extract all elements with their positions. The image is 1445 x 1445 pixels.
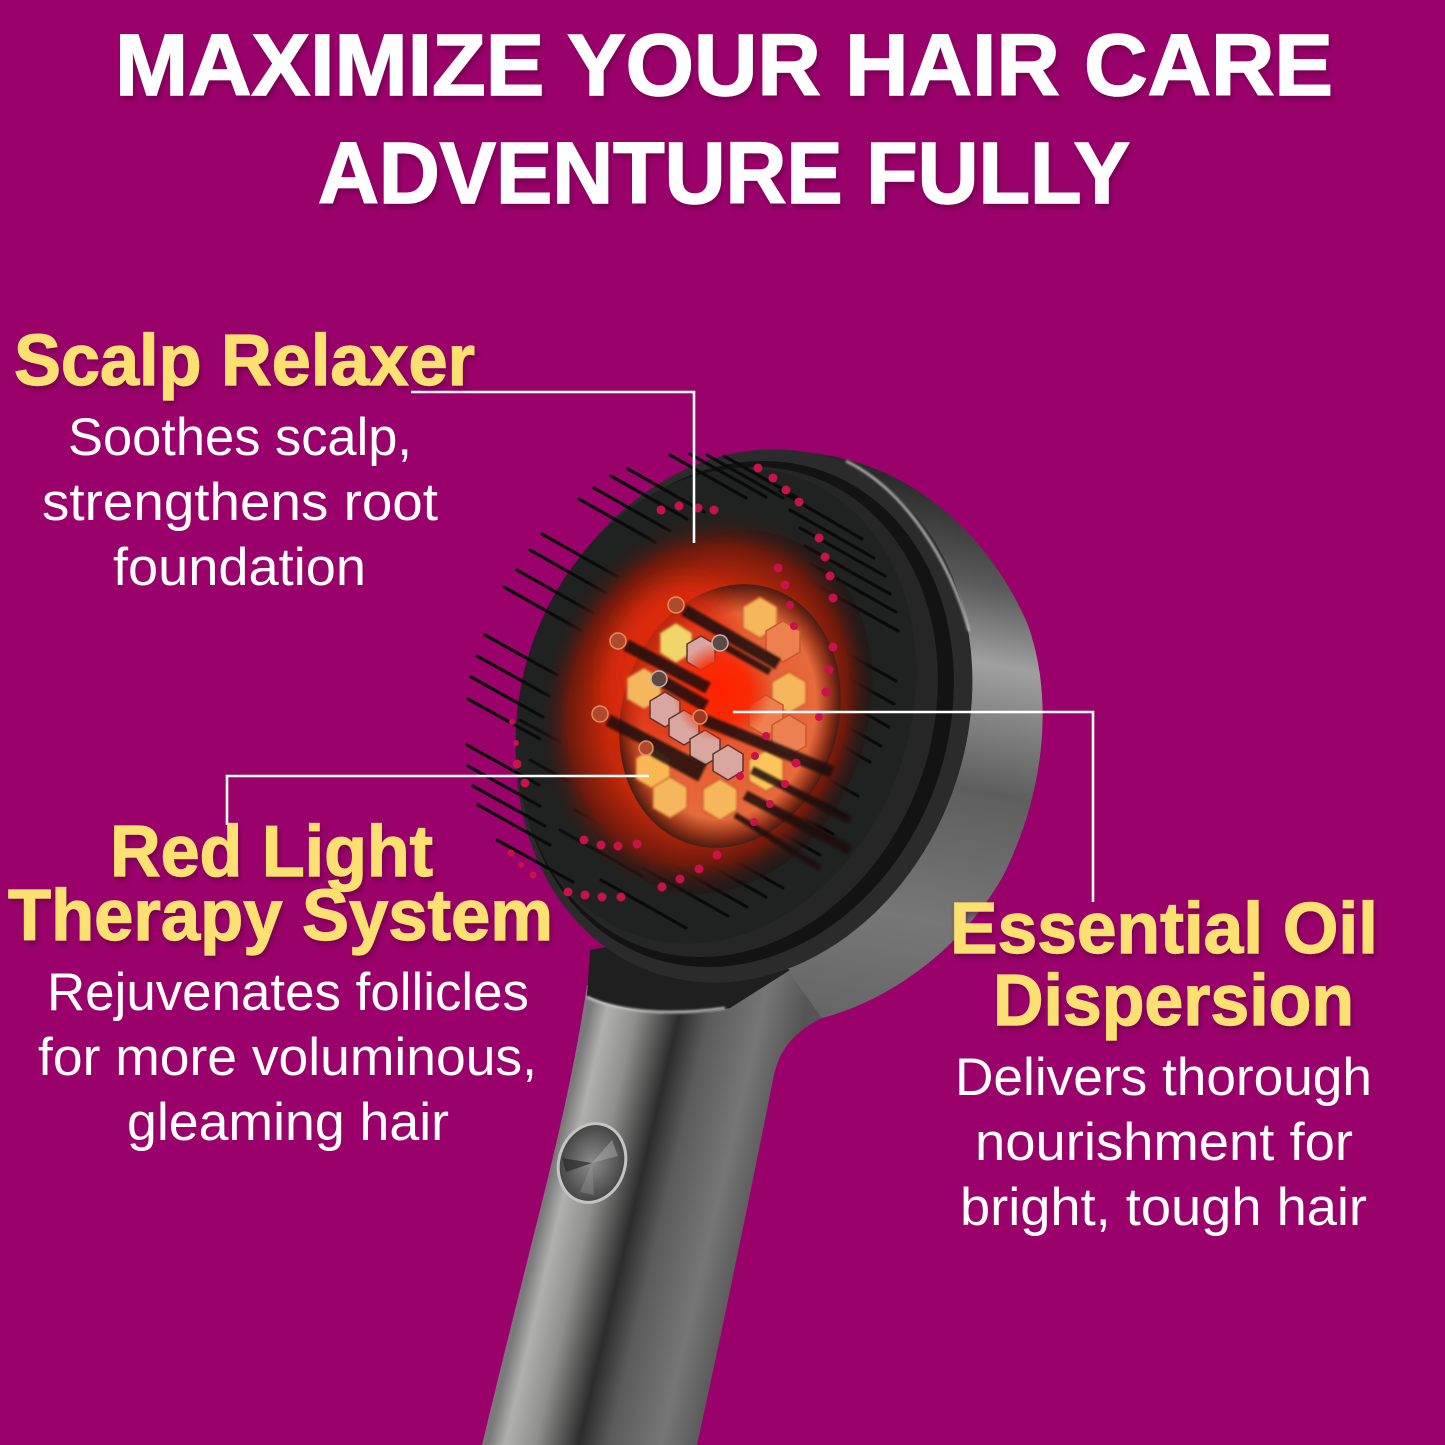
outer bristles bbox=[467, 454, 898, 928]
bristle knobs bbox=[592, 597, 728, 755]
callout: scalp relaxer: Scalp Relaxer bbox=[14, 321, 475, 401]
inner bristle rows bbox=[608, 610, 850, 868]
callout: scalp relaxer: Soothes scalp, bbox=[68, 408, 412, 467]
red glow bbox=[487, 465, 929, 945]
callout: scalp relaxer bbox=[14, 321, 475, 597]
head outer ring bbox=[442, 384, 1046, 1048]
callout: red light therapy system: for more voluminous, bbox=[38, 1028, 537, 1087]
callout: essential oil dispersion: bright, tough hair bbox=[960, 1178, 1367, 1237]
title: ADVENTURE FULLY bbox=[318, 125, 1130, 222]
callout: essential oil dispersion: Essential Oil bbox=[950, 889, 1378, 969]
callout: red light therapy system: Rejuvenates follicles bbox=[47, 963, 529, 1022]
red bristle tips bbox=[508, 464, 838, 902]
title: MAXIMIZE YOUR HAIR CARE bbox=[115, 17, 1333, 114]
illuminated disk bbox=[586, 555, 874, 877]
red overlay on disk bbox=[587, 565, 757, 765]
head rear shell bbox=[620, 452, 1043, 1030]
callout: red light therapy system: gleaming hair bbox=[127, 1093, 449, 1152]
callout line: essential oil dispersion bbox=[733, 712, 1093, 902]
callout: essential oil dispersion: Dispersion bbox=[993, 961, 1354, 1041]
callout: essential oil dispersion: nourishment for bbox=[975, 1113, 1353, 1172]
callout: red light therapy system: Therapy System bbox=[8, 876, 553, 956]
callout: red light therapy system: Red Light bbox=[110, 812, 433, 892]
callout line: scalp relaxer bbox=[411, 392, 694, 543]
brush handle bbox=[482, 960, 822, 1445]
honeycomb light cells bbox=[627, 597, 806, 820]
callout: scalp relaxer: foundation bbox=[113, 538, 366, 597]
callout line: red light therapy bbox=[227, 776, 649, 825]
callout: essential oil dispersion: Delivers thorough bbox=[955, 1048, 1372, 1107]
callout: scalp relaxer: strengthens root bbox=[42, 473, 438, 532]
central red hot spot bbox=[672, 642, 772, 742]
callout: red light therapy system bbox=[8, 812, 553, 1152]
handle button bbox=[548, 1115, 636, 1211]
callout: essential oil dispersion bbox=[950, 889, 1378, 1237]
title bbox=[115, 17, 1333, 222]
product: red light hair brush bbox=[442, 384, 1046, 1445]
neck collar bbox=[587, 930, 790, 1013]
